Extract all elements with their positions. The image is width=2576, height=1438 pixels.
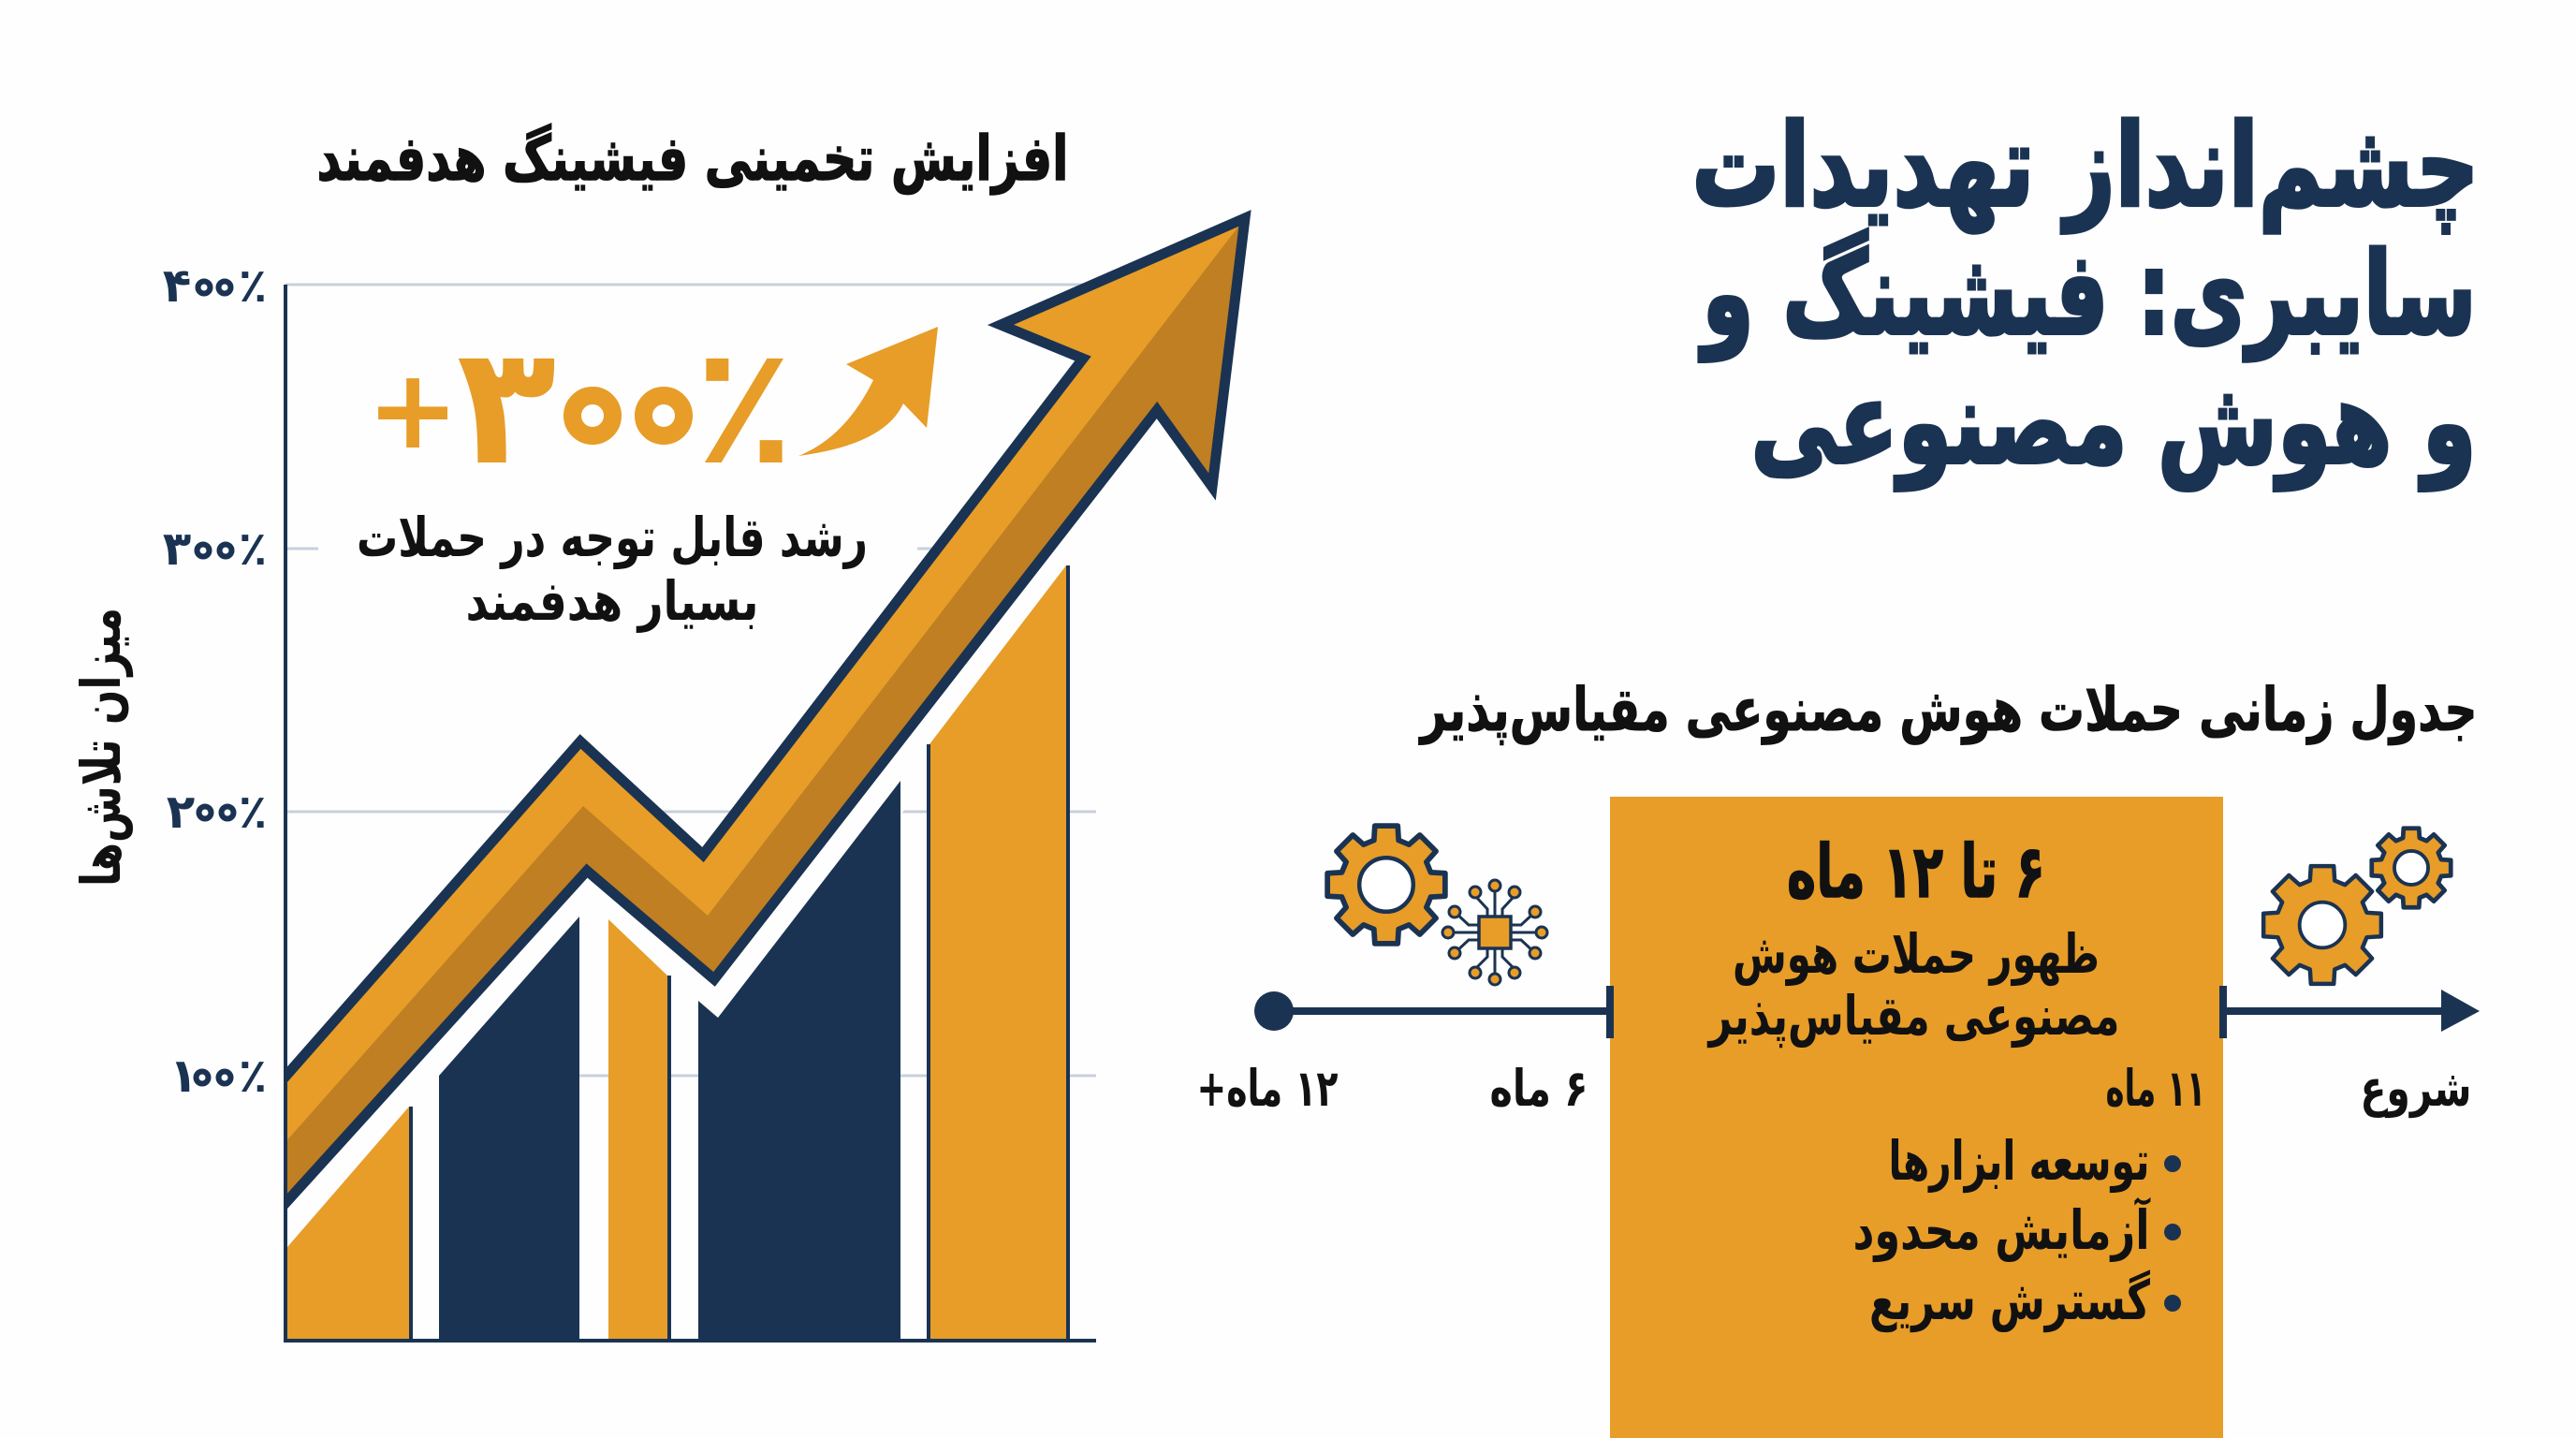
y axis tick labels	[163, 258, 267, 1103]
chart heading: افزایش تخمینی فیشینگ هدفمند	[316, 123, 1069, 195]
panel heading: ۶ تا ۱۲ ماه	[1787, 830, 2045, 915]
timeline labels: شروع	[2361, 1059, 2471, 1118]
timeline labels: ۶ ماه	[1490, 1059, 1588, 1118]
icon: two gears	[2263, 829, 2451, 984]
bar 3	[608, 919, 667, 1339]
timeline labels: ۱۱ ماه	[2106, 1059, 2205, 1118]
y axis	[285, 285, 1096, 1341]
bar 4	[698, 781, 900, 1339]
bullet list	[1853, 1129, 2181, 1333]
bar 2	[439, 917, 579, 1339]
y axis title: میزان تلاش‌ها	[69, 608, 134, 887]
timeline axis	[1254, 990, 2480, 1032]
timeline start dot	[1254, 991, 1294, 1031]
bar 1	[287, 1107, 409, 1339]
timeline ticks	[1606, 986, 2227, 1038]
callout: +300%: ۳۰۰٪	[457, 312, 794, 502]
panel description: ظهور حملات هوش	[1733, 922, 2100, 987]
callout description	[357, 506, 868, 633]
timeline arrow head	[2441, 990, 2480, 1032]
main title	[1692, 99, 2479, 491]
panel: 6 to 12 months	[1610, 797, 2223, 1438]
bullet list: گسترش سریع	[1869, 1269, 2150, 1333]
growth arrow	[277, 218, 1245, 1212]
icon: gear and AI chip	[1327, 826, 1547, 985]
bullet list: توسعه ابزارها	[1889, 1129, 2149, 1194]
panel description: مصنوعی مقیاس‌پذیر	[1706, 984, 2119, 1049]
chart: estimated phishing increase	[271, 218, 1245, 1341]
bullet list: آزمایش محدود	[1853, 1196, 2151, 1263]
bar 5	[929, 565, 1066, 1339]
callout description: رشد قابل توجه در حملات	[357, 506, 868, 570]
callout: +300%: +	[367, 345, 459, 474]
timeline labels: ۱۲ ماه+	[1196, 1059, 1339, 1118]
y axis tick labels: ۳۰۰٪	[163, 521, 267, 576]
timeline labels	[1196, 1059, 2471, 1118]
y axis tick labels: ۱۰۰٪	[169, 1049, 267, 1103]
y axis tick labels: ۴۰۰٪	[163, 258, 267, 313]
icon: small growth arrow	[798, 327, 938, 456]
y axis tick labels: ۲۰۰٪	[167, 785, 267, 839]
panel description	[1706, 922, 2119, 1049]
callout description: بسیار هدفمند	[466, 569, 758, 633]
